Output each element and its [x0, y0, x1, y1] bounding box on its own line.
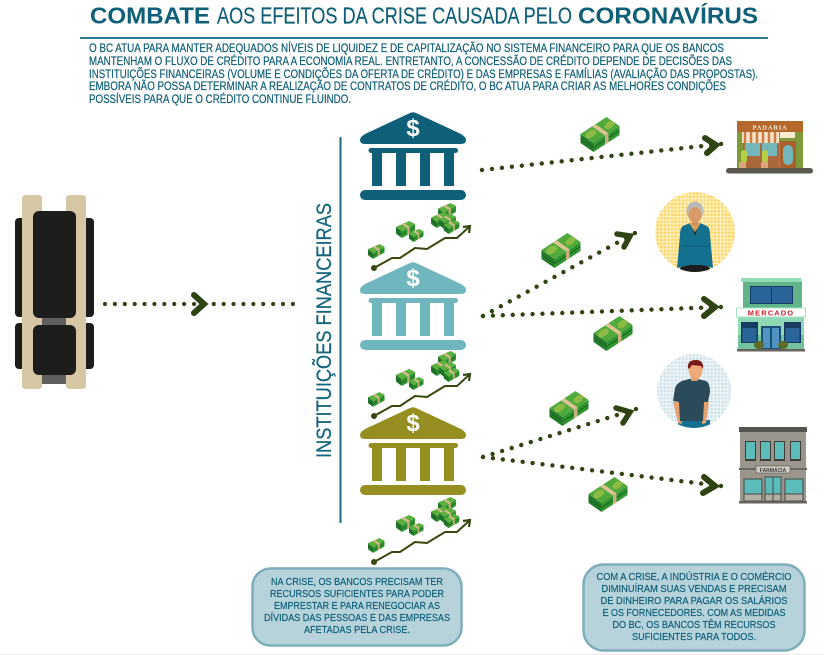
- icon: money 3: [594, 316, 632, 351]
- intro paragraph: MANTENHAM O FLUXO DE CRÉDITO PARA A ECONOMIA REAL. ENTRETANTO, A CONCESSÃO DE CRÉDITO DEPENDE DE DECISÕES DAS: [89, 55, 732, 68]
- callout: industry and commerce: DO BC, OS BANCOS TÊM RECURSOS: [612, 618, 776, 631]
- icon: money 5: [588, 477, 628, 512]
- title: [90, 2, 758, 28]
- callout: banks need resources: RECURSOS SUFICIENTES PARA PODER: [270, 588, 444, 600]
- arrow: vehicle to institutions: [105, 295, 293, 313]
- icon: vehicle top view: [15, 195, 94, 389]
- arrow: bank to bakery: [482, 138, 721, 170]
- callout: industry and commerce: SUFICIENTES PARA TODOS.: [632, 631, 756, 643]
- icon: money 1: [580, 117, 620, 152]
- callout: industry and commerce: [584, 564, 804, 650]
- intro paragraph: [89, 42, 758, 106]
- icon: pharmacy: FARMÁCIA: [760, 467, 787, 474]
- callout: banks need resources: NA CRISE, OS BANCOS PRECISAM TER: [271, 576, 443, 588]
- icon: bakery: [726, 121, 813, 174]
- title: COMBATE: [90, 2, 210, 28]
- chart: money growth 1: [368, 203, 470, 271]
- icon: bank light teal: [360, 262, 466, 350]
- arrow: bank to pharmacy: [483, 457, 721, 493]
- callout: banks need resources: EMPRESTAR E PARA RENEGOCIAR AS: [274, 600, 440, 612]
- title: AOS EFEITOS DA CRISE CAUSADA PELO: [217, 2, 572, 28]
- callout: industry and commerce: E OS FORNECEDORES. COM AS MEDIDAS: [602, 607, 786, 619]
- icon: woman: [655, 192, 735, 272]
- vertical label: instituições financeiras: INSTITUIÇÕES FINANCEIRAS: [312, 203, 336, 458]
- callout: banks need resources: [252, 568, 462, 646]
- callout: industry and commerce: COM A CRISE, A INDÚSTRIA E O COMÉRCIO: [596, 570, 792, 583]
- icon: bank light teal: $: [406, 265, 420, 292]
- icon: money 2: [542, 233, 580, 268]
- chart: money growth 3: [368, 497, 470, 565]
- arrow: bank to market: [483, 299, 721, 316]
- icon: bank olive: $: [406, 410, 420, 437]
- intro paragraph: POSSÍVEIS PARA QUE O CRÉDITO CONTINUE FLUINDO.: [89, 93, 351, 106]
- icon: money 4: [550, 391, 588, 426]
- icon: bank olive: [360, 407, 466, 495]
- icon: market: MERCADO: [748, 308, 794, 318]
- callout: banks need resources: AFETADAS PELA CRISE.: [304, 624, 410, 636]
- title: CORONAVÍRUS: [578, 2, 758, 28]
- icon: bank dark blue: [360, 112, 466, 200]
- intro paragraph: O BC ATUA PARA MANTER ADEQUADOS NÍVEIS DE LIQUIDEZ E DE CAPITALIZAÇÃO NO SISTEMA FINANCEIRO PARA QUE OS BANCOS: [89, 42, 724, 55]
- icon: pharmacy: [739, 427, 807, 504]
- callout: industry and commerce: DE DINHEIRO PARA PAGAR OS SALÁRIOS: [600, 594, 788, 607]
- icon: bank dark blue: $: [406, 115, 420, 142]
- icon: market: [736, 278, 806, 352]
- arrow: bank to man: [483, 408, 636, 457]
- icon: bakery: PADARIA: [752, 124, 788, 132]
- chart: money growth 2: [368, 351, 470, 419]
- intro paragraph: EMBORA NÃO POSSA DETERMINAR A REALIZAÇÃO DE CONTRATOS DE CRÉDITO, O BC ATUA PARA CRIAR AS MELHORES CONDIÇÕES: [89, 80, 726, 93]
- callout: industry and commerce: DIMINUÍRAM SUAS VENDAS E PRECISAM: [602, 582, 786, 595]
- arrow: bank to woman: [483, 233, 635, 316]
- callout: banks need resources: DÍVIDAS DAS PESSOAS E DAS EMPRESAS: [264, 611, 450, 624]
- icon: man: [657, 354, 731, 430]
